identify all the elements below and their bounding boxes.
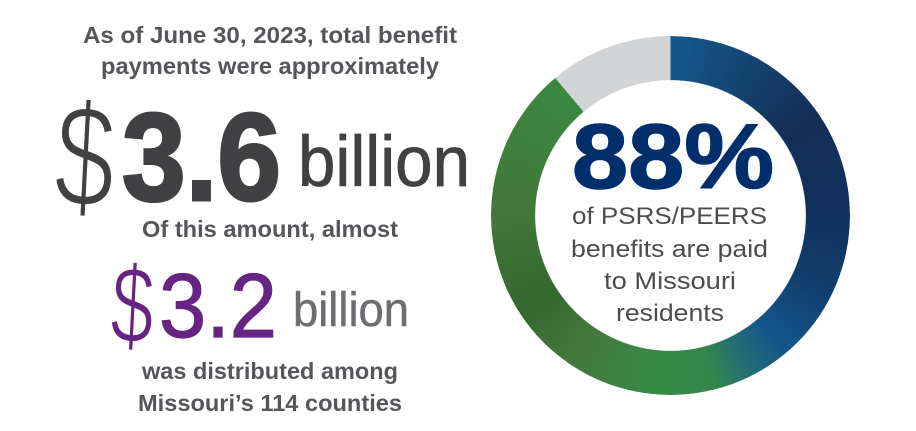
text: of this amount: Of this amount, almost (142, 216, 398, 242)
purple figure: $3.2 billion: 3.2 (159, 256, 277, 357)
donut value: 88%: 88% (572, 106, 774, 208)
donut chart: 88% ring (491, 36, 850, 395)
purple figure: $3.2 billion (108, 243, 409, 368)
donut caption: of PSRS/PEERS (572, 203, 767, 230)
intro text: total benefit payments: payments were approximately (101, 53, 439, 79)
big figure: $3.6 billion: billion (298, 123, 470, 202)
purple figure: $3.2 billion: billion (293, 284, 409, 337)
donut caption (571, 203, 768, 327)
text: distributed among counties: Missouri’s 114 counties (138, 390, 402, 416)
donut caption: to Missouri (604, 268, 736, 295)
intro text: total benefit payments: As of June 30, 2023, total benefit (83, 22, 457, 48)
big figure: $3.6 billion: $ (51, 74, 119, 240)
purple figure: $3.2 billion: $ (108, 243, 157, 368)
donut caption: benefits are paid (571, 236, 768, 263)
text: distributed among counties (138, 358, 402, 416)
big figure: $3.6 billion: 3.6 (122, 89, 281, 227)
intro text: total benefit payments (83, 22, 457, 79)
donut caption: residents (616, 300, 724, 327)
text: distributed among counties: was distributed among (141, 358, 398, 384)
big figure: $3.6 billion (51, 74, 470, 240)
